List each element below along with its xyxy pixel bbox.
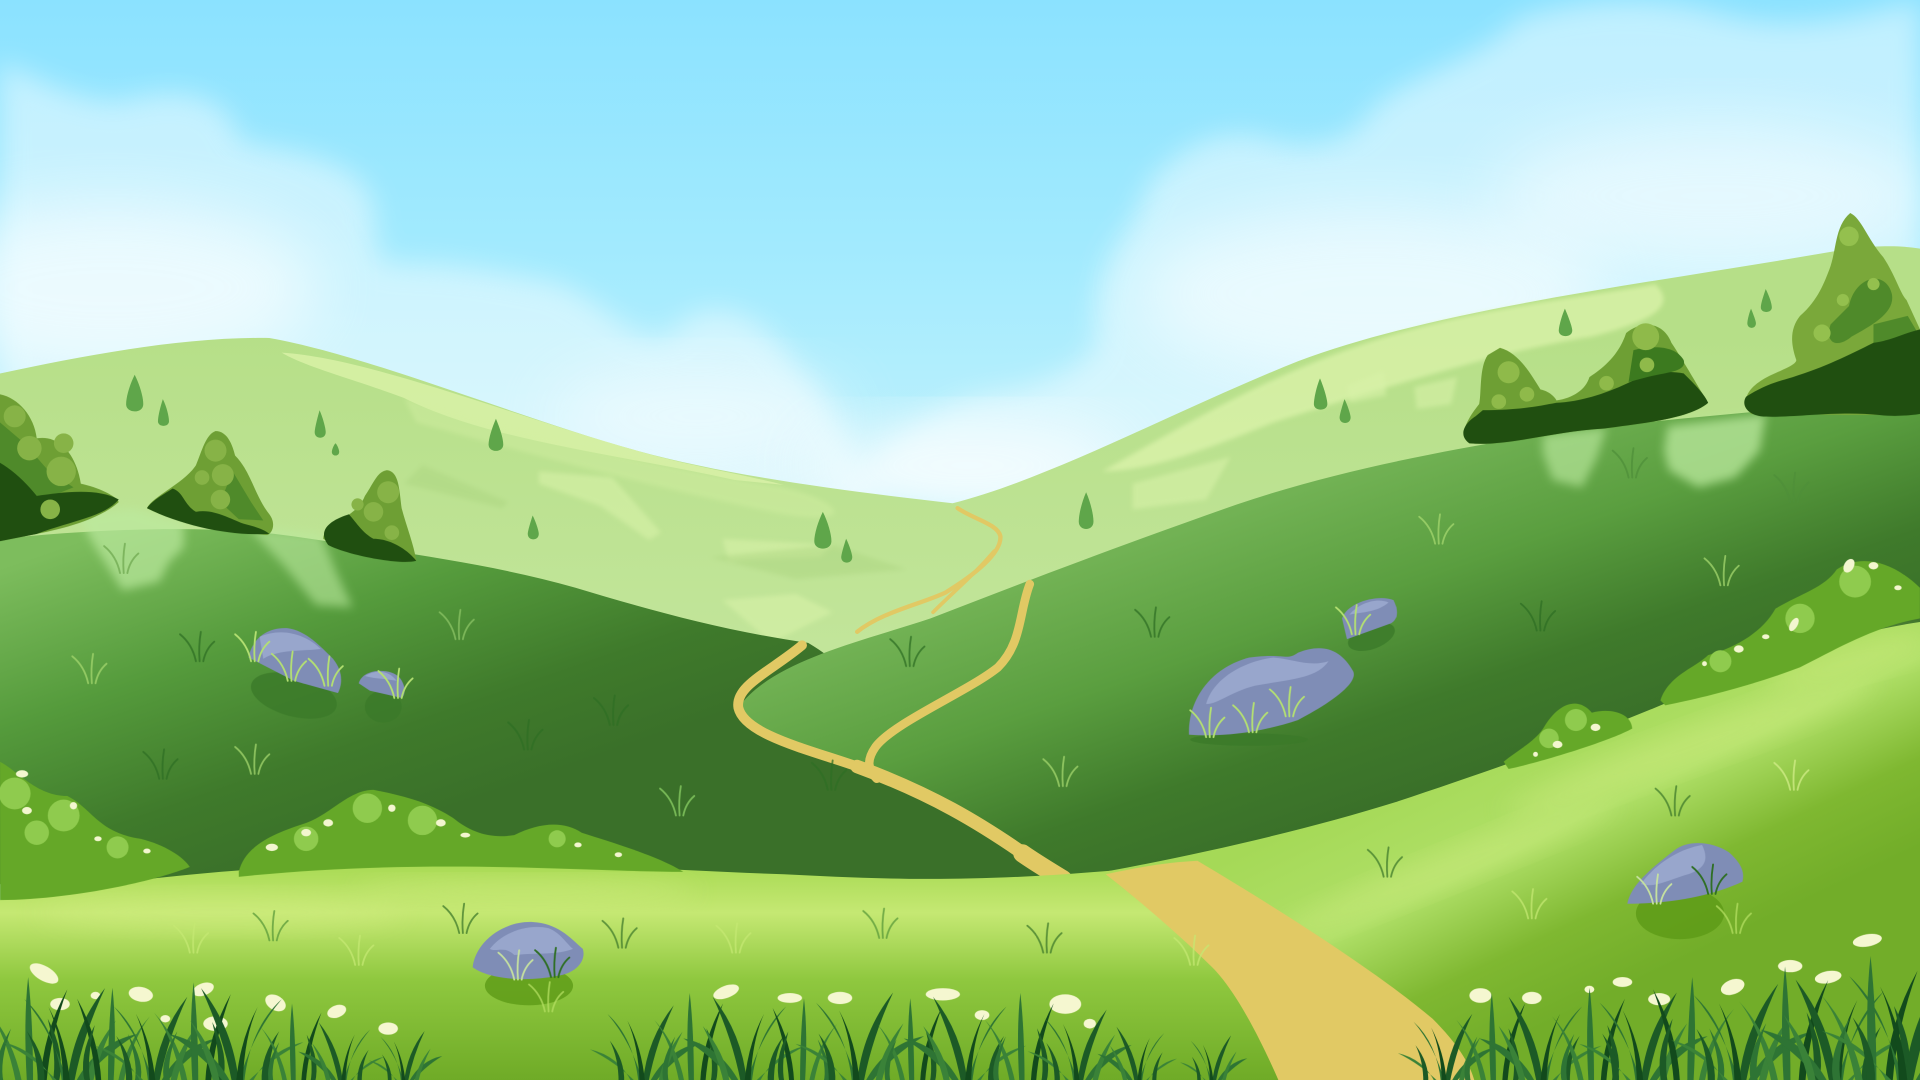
left middle hill [0,529,1078,884]
rock: foreground right [1627,843,1743,939]
shrub: right small [1504,704,1632,769]
shrub: left lower [0,762,190,900]
rock: left large [249,628,341,693]
bush: far left [0,394,119,541]
shrub: right long [1660,557,1920,705]
soft highlights on foreground [37,622,1920,954]
right middle hill [738,394,1920,894]
bush: left second [147,431,273,535]
bushes: right pair [1463,323,1708,444]
front left hill [0,862,1384,1080]
wide road [1106,861,1474,1080]
rock: centre right small [1342,598,1397,639]
clouds right [808,0,1920,514]
hill light reflections [77,414,1766,607]
path through valley [738,584,1063,879]
foreground grass centre [590,992,1247,1080]
foreground grass left [0,977,442,1080]
white flowers [27,932,1883,1035]
clouds left [0,61,882,514]
rock grass [235,605,1727,980]
front right hill [1078,622,1920,1080]
rock: left small [359,671,405,698]
foreground grass right [1398,956,1920,1080]
rock shadows [246,617,1399,746]
small trees on far hills [126,289,1772,563]
rock: foreground left [473,922,584,1005]
path far section [857,508,1000,632]
bush: left third [323,470,416,562]
rock: centre right large [1189,648,1354,735]
far hills [0,246,1920,686]
small grass on hills [72,448,1809,1011]
shrub: left centre [239,790,683,877]
bush: far right [1744,213,1920,417]
